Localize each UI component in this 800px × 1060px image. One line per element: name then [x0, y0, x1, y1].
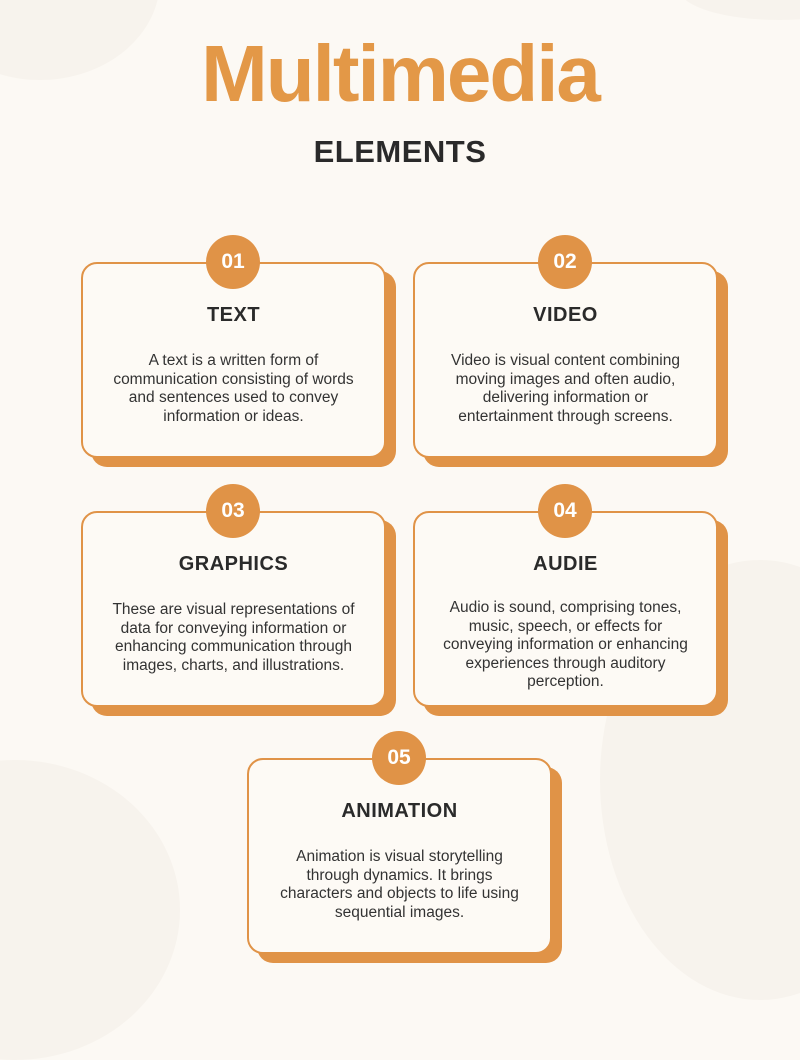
text: 02	[553, 250, 577, 273]
text: 01	[221, 250, 245, 273]
panel: graphics: These are visual representations of data for conveying information or enhancing communication through images, charts, and illustrations.	[112, 601, 355, 674]
panel: text: A text is a written form of communication consisting of words and sentences used to convey information or ideas.	[113, 352, 354, 424]
subtitle: ELEMENTS	[314, 134, 486, 169]
text: 03	[221, 499, 245, 522]
panel: text: TEXT	[207, 304, 260, 326]
panel: video: VIDEO	[533, 304, 598, 326]
panel: text	[81, 235, 396, 467]
panel: animation	[247, 731, 562, 963]
text: 05	[387, 746, 411, 769]
panel: graphics	[81, 484, 396, 716]
panel: animation: ANIMATION	[341, 800, 458, 822]
panel: video	[413, 235, 728, 467]
panel: graphics: GRAPHICS	[179, 553, 288, 575]
panel: audio: Audio is sound, comprising tones, music, speech, or effects for conveying information or enhancing experiences through auditory perception.	[443, 599, 688, 690]
panel: audio	[413, 484, 728, 716]
panel: audio: AUDIE	[533, 553, 598, 575]
panel: video: Video is visual content combining moving images and often audio, delivering information or entertainment through screens.	[451, 352, 680, 424]
title: Multimedia	[201, 29, 599, 118]
text: 04	[553, 499, 577, 522]
panel: animation: Animation is visual storytelling through dynamics. It brings characters and objects to life using sequential images.	[280, 848, 519, 920]
